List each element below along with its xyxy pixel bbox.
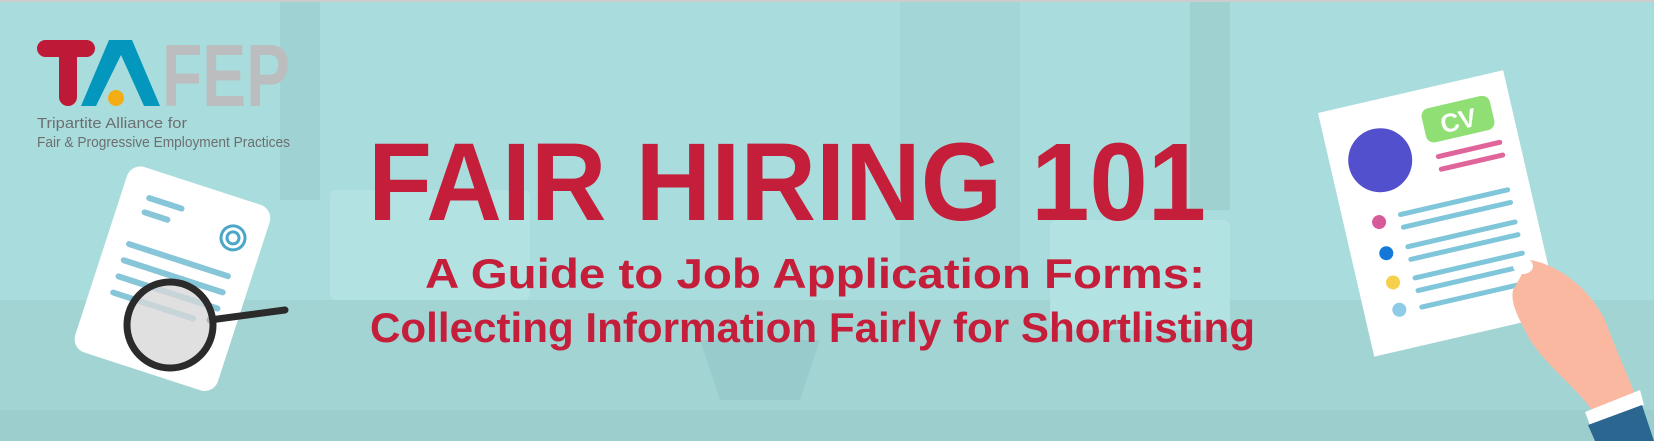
logo tagline [37,115,290,151]
icon: CV held by hand: CV [1437,102,1480,139]
title: FAIR HIRING 101 [368,121,1206,244]
T [37,40,95,106]
logo: TAFEP [37,38,290,151]
icon: CV held by hand [1318,70,1654,441]
subtitle [370,250,1255,351]
subtitle: A Guide to Job Application Forms: [425,250,1205,297]
A [81,40,160,106]
subtitle: Collecting Information Fairly for Shortlisting [370,304,1255,351]
logo tagline: Tripartite Alliance for [37,115,187,132]
icon: document with magnifier [74,166,288,391]
